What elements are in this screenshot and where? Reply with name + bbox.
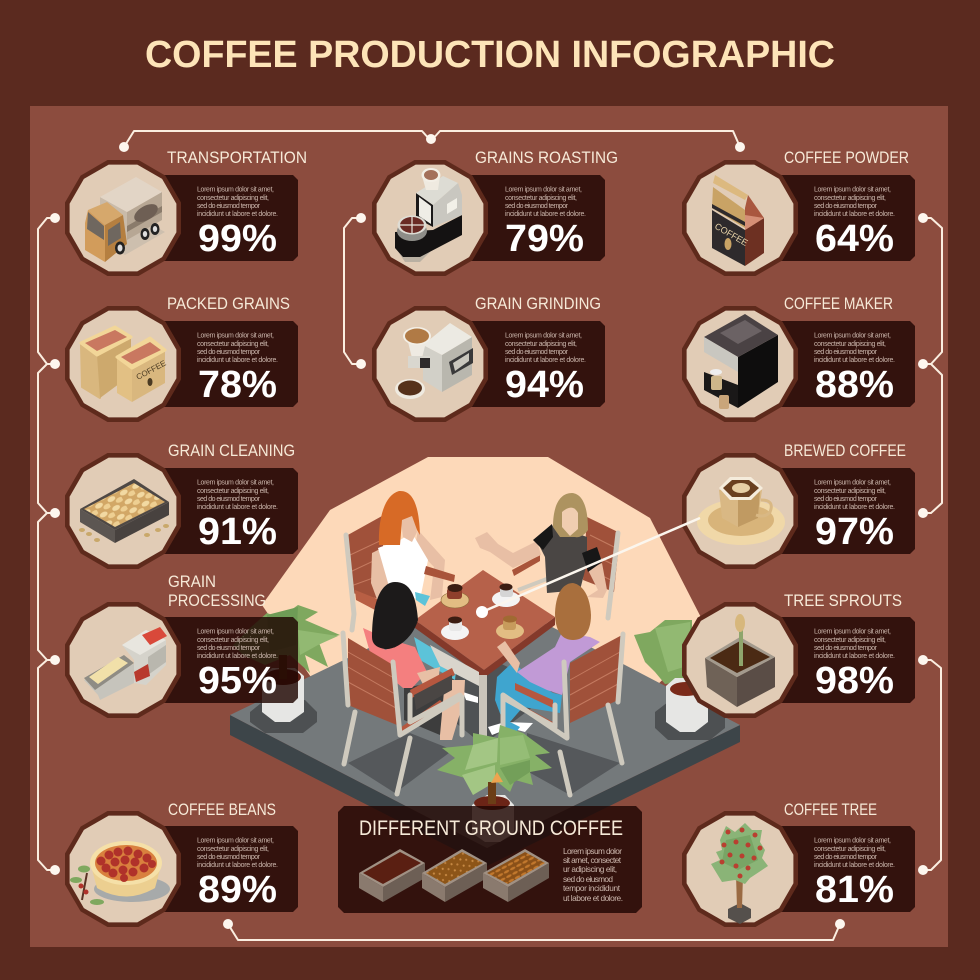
card: transportation: 99%	[198, 218, 277, 260]
icon: truck	[85, 177, 165, 262]
card: grains roasting: GRAINS ROASTING	[475, 149, 618, 167]
card: grain cleaning: 91%	[198, 511, 277, 553]
card: grain cleaning: consectetur adipiscing elit,	[197, 488, 269, 495]
card: grain processing: GRAIN	[168, 573, 216, 591]
card: grain grinding: Lorem ipsum dolor sit amet,	[505, 332, 582, 340]
card: grain grinding: sed do eiusmod tempor	[505, 349, 569, 356]
card: grain processing: consectetur adipiscing elit,	[197, 637, 269, 644]
icon: coffee tree	[711, 823, 768, 924]
icon: coffee bag	[712, 175, 764, 266]
card: grain cleaning	[65, 442, 298, 569]
card: tree sprouts	[682, 592, 915, 718]
icon: sprout in pot	[705, 614, 775, 707]
card: grain cleaning: Lorem ipsum dolor sit amet,	[197, 480, 274, 486]
card: grain processing: Lorem ipsum dolor sit amet,	[197, 628, 274, 636]
card: tree sprouts: TREE SPROUTS	[784, 592, 902, 610]
card: brewed coffee: consectetur adipiscing elit,	[814, 488, 886, 495]
card: coffee beans: 89%	[198, 869, 277, 911]
card: coffee tree	[682, 801, 915, 927]
card: coffee beans: consectetur adipiscing elit,	[197, 846, 269, 853]
card: transportation	[65, 149, 307, 276]
card: coffee beans: sed do eiusmod tempor	[197, 854, 261, 861]
card: coffee beans	[65, 801, 298, 927]
card: coffee maker: 88%	[815, 364, 894, 406]
heading: DIFFERENT GROUND COFFEE	[359, 817, 623, 840]
woman: black hair	[363, 582, 465, 740]
description: sed do eiusmod	[563, 874, 613, 884]
description: ur adipiscing elit,	[563, 864, 617, 874]
card: coffee beans: incididunt ut labore et dolore.	[197, 862, 278, 869]
card: packed grains: consectetur adipiscing elit,	[197, 341, 269, 348]
woman: blonde hair	[475, 493, 607, 598]
card: grains roasting	[372, 149, 618, 276]
card: brewed coffee: BREWED COFFEE	[784, 442, 906, 460]
card: coffee powder: Lorem ipsum dolor sit amet,	[814, 186, 891, 194]
card: grain cleaning: incididunt ut labore et dolore.	[197, 504, 278, 511]
card: packed grains: sed do eiusmod tempor	[197, 349, 261, 356]
card: tree sprouts: Lorem ipsum dolor sit amet,	[814, 628, 891, 636]
light background	[262, 457, 710, 720]
card: coffee powder: COFFEE POWDER	[784, 149, 909, 167]
panel: different ground coffee	[338, 806, 642, 913]
card: grain processing: incididunt ut labore et dolore.	[197, 653, 278, 660]
card: coffee tree: consectetur adipiscing elit,	[814, 846, 886, 853]
table	[415, 570, 555, 737]
card: coffee maker: COFFEE MAKER	[784, 295, 893, 313]
card: coffee powder	[682, 149, 915, 276]
card: grain grinding	[372, 295, 605, 422]
card: brewed coffee	[682, 442, 915, 569]
card: packed grains: Lorem ipsum dolor sit amet,	[197, 332, 274, 340]
card: coffee maker: sed do eiusmod tempor	[814, 349, 878, 356]
icon: processing machine	[84, 627, 167, 700]
card: tree sprouts: sed do eiusmod tempor	[814, 645, 878, 652]
card: tree sprouts: consectetur adipiscing elit,	[814, 637, 886, 644]
card: coffee maker: incididunt ut labore et dolore.	[814, 357, 895, 364]
card: packed grains: PACKED GRAINS	[167, 295, 290, 313]
card: packed grains: incididunt ut labore et dolore.	[197, 357, 278, 364]
icon: roaster	[395, 168, 462, 262]
card: coffee tree: 81%	[815, 869, 894, 911]
card: grain cleaning: sed do eiusmod tempor	[197, 496, 261, 503]
card: coffee maker	[682, 295, 915, 422]
blue shorts under table	[414, 637, 457, 680]
card: grains roasting: 79%	[505, 218, 584, 260]
card: grains roasting: incididunt ut labore et dolore.	[505, 211, 586, 218]
card: brewed coffee: 97%	[815, 511, 894, 553]
icon: coffee bag: COFFEE	[713, 221, 750, 248]
plant front	[437, 725, 552, 842]
description: ut labore et dolore.	[563, 893, 623, 903]
card: grain cleaning: GRAIN CLEANING	[168, 442, 295, 460]
card: coffee beans: COFFEE BEANS	[168, 801, 276, 819]
card: coffee tree: COFFEE TREE	[784, 801, 877, 819]
chair front left	[343, 633, 462, 794]
chair front right	[503, 634, 623, 795]
card: coffee maker: consectetur adipiscing elit,	[814, 341, 886, 348]
card: transportation: consectetur adipiscing elit,	[197, 195, 269, 202]
card: tree sprouts: incididunt ut labore et dolore.	[814, 653, 895, 660]
card: tree sprouts: 98%	[815, 660, 894, 702]
plant left	[233, 605, 340, 733]
icon: grain tray	[79, 479, 169, 543]
icon: sacks: COFFEE	[135, 359, 168, 382]
card: packed grains: 78%	[198, 364, 277, 406]
description: sit amet, consectet	[563, 855, 622, 865]
pointer line from table to brewed coffee	[476, 518, 700, 618]
title: COFFEE PRODUCTION INFOGRAPHIC	[145, 34, 835, 76]
card: grain grinding: GRAIN GRINDING	[475, 295, 601, 313]
icon: sacks	[81, 327, 168, 402]
card: grains roasting: consectetur adipiscing elit,	[505, 195, 577, 202]
card: packed grains	[65, 295, 298, 422]
icon: bowl of red beans	[70, 841, 170, 905]
card: coffee maker: Lorem ipsum dolor sit amet,	[814, 332, 891, 340]
plant right	[634, 620, 725, 740]
card: coffee powder: incididunt ut labore et dolore.	[814, 211, 895, 218]
card: coffee beans: Lorem ipsum dolor sit amet,	[197, 838, 274, 844]
chair back left	[346, 516, 385, 630]
card: grain processing: PROCESSING	[168, 592, 266, 610]
card: grain processing: sed do eiusmod tempor	[197, 645, 261, 652]
card: transportation: Lorem ipsum dolor sit amet,	[197, 186, 274, 194]
central scene: cafe table with four women	[230, 457, 740, 866]
icon: espresso machine	[704, 314, 778, 409]
woman: long brown hair	[495, 583, 600, 740]
woman: red hair	[371, 491, 455, 606]
card: coffee powder: consectetur adipiscing elit,	[814, 195, 886, 202]
card: grain grinding: consectetur adipiscing elit,	[505, 341, 577, 348]
description: tempor incididunt	[563, 883, 621, 893]
card: transportation: sed do eiusmod tempor	[197, 203, 261, 210]
card: coffee powder: 64%	[815, 218, 894, 260]
connector lines	[38, 131, 942, 940]
card: coffee tree: sed do eiusmod tempor	[814, 854, 878, 861]
card: brewed coffee: Lorem ipsum dolor sit amet,	[814, 480, 891, 486]
card: coffee powder: sed do eiusmod tempor	[814, 203, 878, 210]
icon: grinder	[395, 323, 473, 399]
card: grain grinding: incididunt ut labore et dolore.	[505, 357, 586, 364]
cups	[441, 584, 524, 640]
card: coffee tree: incididunt ut labore et dolore.	[814, 862, 895, 869]
card: brewed coffee: incididunt ut labore et dolore.	[814, 504, 895, 511]
description	[563, 846, 623, 903]
card: grains roasting: Lorem ipsum dolor sit amet,	[505, 186, 582, 194]
shoes	[463, 692, 533, 735]
floor platform	[230, 592, 740, 866]
card: grains roasting: sed do eiusmod tempor	[505, 203, 569, 210]
card: transportation: incididunt ut labore et dolore.	[197, 211, 278, 218]
chair back right	[512, 517, 620, 618]
icon: coffee cup on saucer	[697, 477, 785, 545]
ground coffee trays	[359, 849, 549, 902]
card: brewed coffee: sed do eiusmod tempor	[814, 496, 878, 503]
description: Lorem ipsum dolor	[563, 846, 622, 856]
card: coffee tree: Lorem ipsum dolor sit amet,	[814, 838, 891, 844]
card: grain grinding: 94%	[505, 364, 584, 406]
card: transportation: TRANSPORTATION	[167, 149, 307, 167]
card: grain processing	[65, 573, 298, 718]
card: grain processing: 95%	[198, 660, 277, 702]
